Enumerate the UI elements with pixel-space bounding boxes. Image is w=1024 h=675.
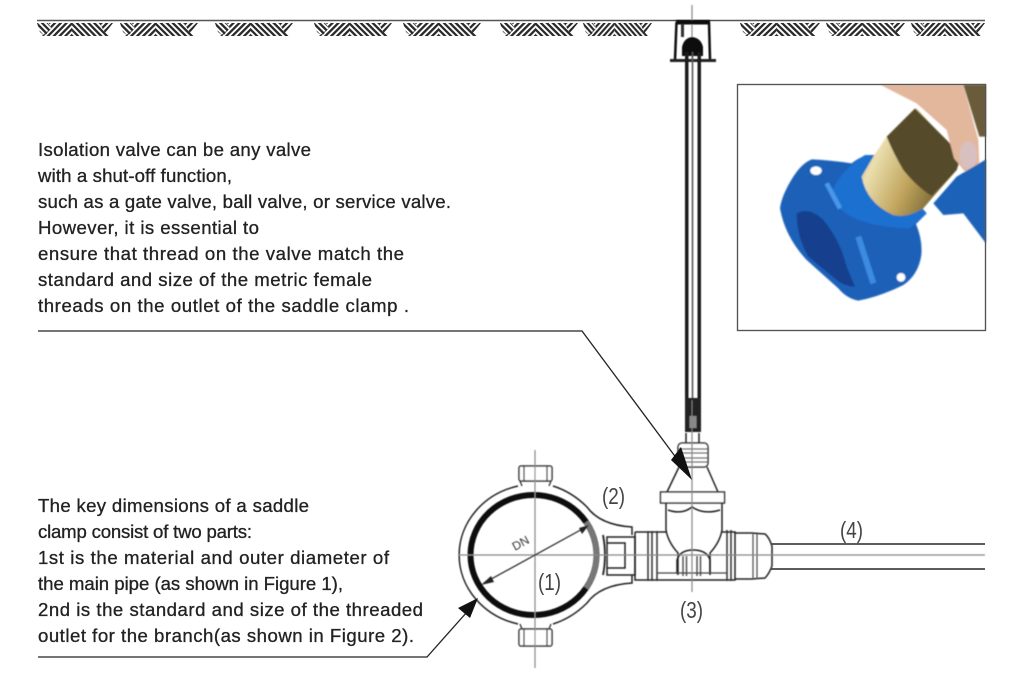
icon: blue wrench part <box>933 159 986 243</box>
dimension DN arrow: DN <box>510 533 532 554</box>
text block: isolation valve: Isolation valve can be any valve <box>38 139 311 160</box>
text block: isolation valve: such as a gate valve, ball valve, or service valve. <box>38 191 451 212</box>
part labels: (1) <box>538 569 561 595</box>
ground surface <box>37 20 985 36</box>
text block: isolation valve: ensure that thread on the valve match the <box>38 243 404 264</box>
icon: brass fitting <box>862 108 960 216</box>
text block: key dimensions: outlet for the branch(as shown in Figure 2). <box>38 625 414 646</box>
part labels: (2) <box>602 483 625 509</box>
icon: blue saddle clamp <box>780 155 927 301</box>
part labels: (3) <box>680 597 703 623</box>
text block: key dimensions: The key dimensions of a saddle <box>38 495 309 516</box>
text block: key dimensions: clamp consist of two parts: <box>38 521 252 542</box>
part labels: (4) <box>840 517 863 543</box>
dimension DN arrow <box>481 525 589 585</box>
text block: isolation valve: standard and size of the metric female <box>38 269 372 290</box>
text block: key dimensions: the main pipe (as shown in Figure 1), <box>38 573 343 594</box>
text block: key dimensions: 2nd is the standard and size of the threaded <box>38 599 423 620</box>
text block: isolation valve <box>37 139 451 316</box>
arrow: isolation valve leader <box>38 331 692 480</box>
branch pipe <box>771 544 985 569</box>
text block: isolation valve: However, it is essential to <box>38 217 259 238</box>
arrow: saddle clamp leader <box>38 598 478 657</box>
part labels <box>538 483 863 623</box>
icon: hand <box>880 85 979 172</box>
text block: isolation valve: with a shut-off function, <box>37 165 232 186</box>
text block: key dimensions: 1st is the material and outer diameter of <box>38 547 390 568</box>
text block: key dimensions <box>38 495 423 646</box>
gate valve <box>607 433 772 581</box>
surface box and vertical stem <box>670 5 716 432</box>
bolts <box>519 466 552 646</box>
saddle clamp <box>458 400 985 668</box>
product photo <box>738 84 986 330</box>
text block: isolation valve: threads on the outlet of the saddle clamp . <box>38 295 409 316</box>
